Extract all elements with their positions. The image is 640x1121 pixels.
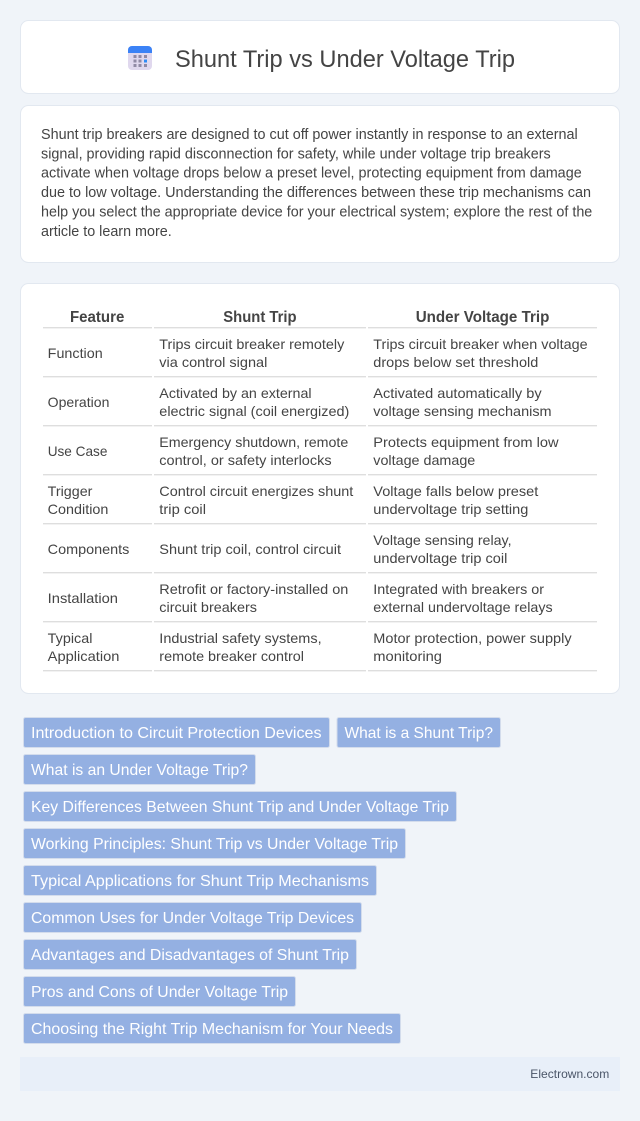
- table row: use case: voltage damage: [373, 452, 476, 468]
- tag: working principles: Working Principles: Shunt Trip vs Under Voltage Trip: [31, 836, 398, 853]
- table row: typical application: Industrial safety systems,: [159, 630, 322, 646]
- table row: operation: Activated automatically by: [373, 385, 542, 401]
- table row: operation: voltage sensing mechanism: [373, 403, 552, 419]
- table row: function: via control signal: [159, 354, 267, 370]
- heading: page title: Shunt Trip vs Under Voltage Trip: [175, 46, 515, 73]
- text block: introduction paragraph: signal, providing rapid disconnection for safety, while under voltage trip breakers: [41, 146, 551, 162]
- table row: operation: electric signal (coil energized): [159, 403, 349, 419]
- table row: typical application: Typical: [48, 630, 92, 646]
- table header row: Feature: [70, 309, 124, 326]
- table row: function: Trips circuit breaker when voltage: [373, 336, 588, 352]
- tag: choosing the right mechanism: [24, 1014, 400, 1044]
- tag: introduction: [24, 718, 330, 748]
- table row: function: drops below set threshold: [373, 354, 538, 370]
- tag: common uses: Common Uses for Under Voltage Trip Devices: [31, 910, 354, 927]
- tag: what is an under voltage trip: What is an Under Voltage Trip?: [31, 762, 248, 779]
- table row: operation: Operation: [48, 394, 109, 410]
- tag: introduction: Introduction to Circuit Protection Devices: [31, 725, 322, 742]
- table row: use case: control, or safety interlocks: [159, 452, 332, 468]
- table row: typical application: remote breaker control: [159, 648, 304, 664]
- text block: introduction paragraph: [41, 127, 592, 240]
- table row: use case: Use Case: [48, 443, 108, 459]
- text block: introduction paragraph: article to learn more.: [41, 224, 172, 240]
- table row: typical application: Motor protection, power supply: [373, 630, 572, 646]
- table row: installation: Installation: [48, 590, 118, 606]
- tag: what is a shunt trip: [337, 718, 500, 748]
- table header row: [70, 309, 550, 326]
- table row: typical application: monitoring: [373, 648, 442, 664]
- footer bar: Electrown.com: [530, 1067, 609, 1081]
- table row: trigger condition: Condition: [48, 501, 108, 517]
- text block: introduction paragraph: help you select the appropriate device for your electrical system; explore the rest of the: [41, 204, 592, 220]
- table row: function: Function: [48, 345, 103, 361]
- tag: key differences: [24, 792, 456, 822]
- panel: title card: [20, 20, 620, 94]
- table row: installation: Retrofit or factory-installed on: [159, 581, 348, 597]
- tag: advantages and disadvantages: [24, 940, 356, 970]
- tag: pros and cons: Pros and Cons of Under Voltage Trip: [31, 984, 288, 1001]
- text block: introduction paragraph: activate when voltage drops below a preset level, protecting equipment from damage: [41, 166, 582, 182]
- table row: installation: external undervoltage relays: [373, 599, 553, 615]
- table row: typical application: [48, 630, 572, 664]
- tag: advantages and disadvantages: Advantages and Disadvantages of Shunt Trip: [31, 947, 349, 964]
- tag: pros and cons: [24, 976, 296, 1006]
- table row: trigger condition: Control circuit energizes shunt: [159, 483, 353, 499]
- table row: installation: Integrated with breakers or: [373, 581, 544, 597]
- panel: topic links: [24, 718, 500, 1044]
- tag: choosing the right mechanism: Choosing the Right Trip Mechanism for Your Needs: [31, 1021, 393, 1038]
- panel: introduction: [20, 106, 620, 262]
- text block: introduction paragraph: Shunt trip breakers are designed to cut off power instantly in response to an external: [41, 127, 578, 143]
- table row: trigger condition: trip coil: [159, 501, 206, 517]
- text block: introduction paragraph: due to low voltage. Understanding the differences between these trip mechanisms can: [41, 185, 591, 201]
- tag: working principles: [24, 828, 406, 858]
- table row: components: Components: [48, 541, 129, 557]
- icon: calendar: [128, 46, 152, 70]
- table row: use case: Protects equipment from low: [373, 434, 560, 450]
- table row: use case: [48, 434, 560, 468]
- table header row: Under Voltage Trip: [416, 309, 550, 326]
- table row: typical application: Application: [48, 648, 119, 664]
- table row: trigger condition: undervoltage trip setting: [373, 501, 528, 517]
- footer bar: [20, 1057, 620, 1091]
- table row: operation: [48, 385, 552, 419]
- table row: components: [48, 532, 512, 566]
- table row: trigger condition: Trigger: [48, 483, 93, 499]
- table row: installation: circuit breakers: [159, 599, 257, 615]
- tag: typical applications: [24, 866, 376, 896]
- table row: components: Voltage sensing relay,: [373, 532, 512, 548]
- table row: operation: Activated by an external: [159, 385, 312, 401]
- table row: use case: Emergency shutdown, remote: [159, 434, 349, 450]
- table row: components: undervoltage trip coil: [373, 550, 507, 566]
- table row: function: [48, 336, 588, 370]
- tag: typical applications: Typical Applications for Shunt Trip Mechanisms: [31, 873, 369, 890]
- table row: installation: [48, 581, 553, 615]
- table row: trigger condition: Voltage falls below preset: [373, 483, 538, 499]
- panel: comparison table: [20, 284, 620, 694]
- tag: what is a shunt trip: What is a Shunt Trip?: [344, 725, 493, 742]
- tag: key differences: Key Differences Between Shunt Trip and Under Voltage Trip: [31, 799, 449, 816]
- table header row: Shunt Trip: [223, 309, 297, 326]
- tag: what is an under voltage trip: [24, 754, 256, 784]
- table row: function: Trips circuit breaker remotely: [159, 336, 344, 352]
- table row: trigger condition: [48, 483, 538, 517]
- table row: components: Shunt trip coil, control circuit: [159, 541, 341, 557]
- tag: common uses: [24, 902, 362, 932]
